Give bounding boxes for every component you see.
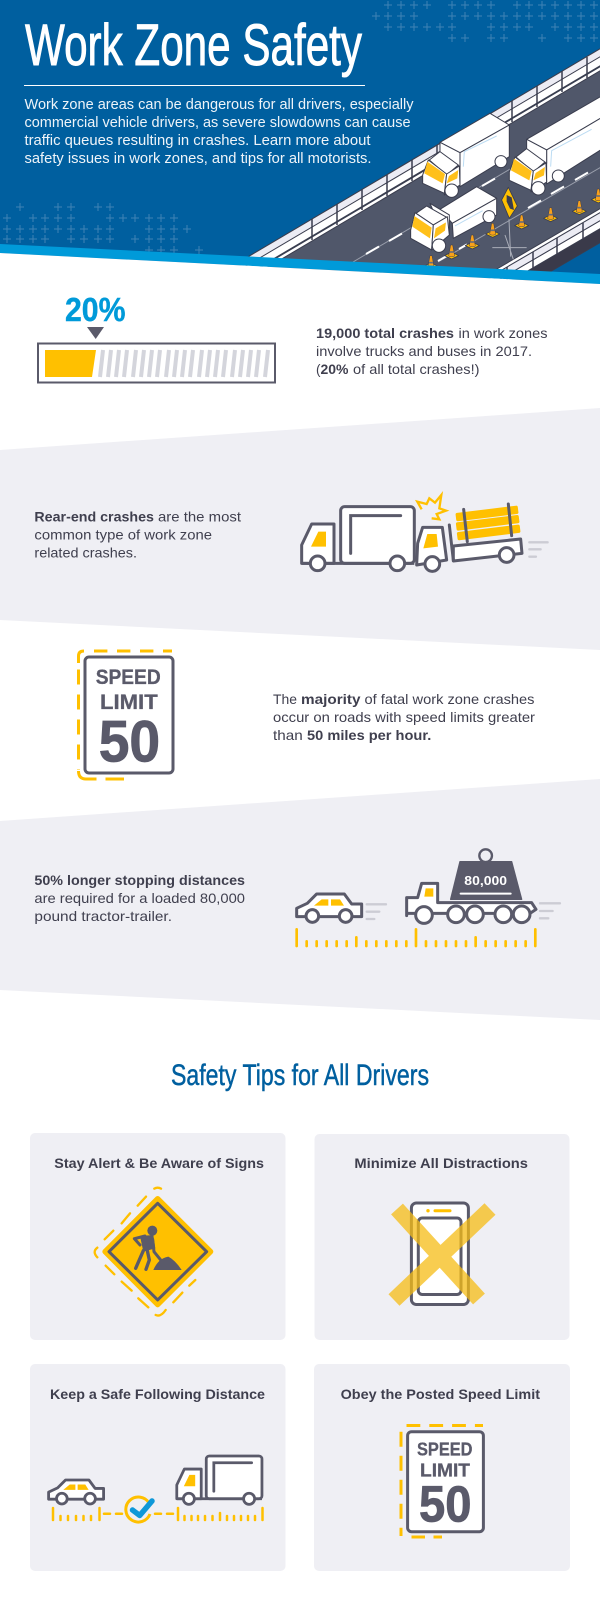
- heading: safety tips: Safety Tips for All Drivers: [171, 1059, 429, 1092]
- icon: car following truck: [49, 1456, 262, 1522]
- icon: speed limit 50 sign: [78, 651, 173, 779]
- fatal crashes text: of fatal work zone crashes: [364, 691, 534, 707]
- lower barrier: [490, 197, 600, 301]
- truck A: [423, 113, 509, 197]
- stopping distance text: pound tractor-trailer.: [34, 908, 172, 924]
- work zone sign: [502, 187, 517, 218]
- impact burst: [417, 495, 446, 519]
- motion lines: [529, 542, 548, 557]
- panel: stopping distance background: [0, 779, 600, 1020]
- icon: road work sign: [95, 1188, 211, 1316]
- icon: truck rear-end collision: [302, 495, 548, 571]
- panel: obey speed limit: [314, 1364, 570, 1571]
- panel: 20 percent of crashes: [38, 291, 548, 382]
- worker with shovel: [134, 1226, 182, 1270]
- card title: Obey the Posted Speed Limit: [341, 1386, 540, 1402]
- traffic cones: [424, 189, 600, 270]
- crash statistic text: of all total crashes!): [353, 361, 480, 377]
- fatal crashes text: than: [273, 727, 303, 743]
- panel: rear-end crashes background: [0, 408, 600, 650]
- traffic cones and trucks, drawn in zoom coordinates: [411, 95, 600, 270]
- icon: speed limit 50 sign: LIMIT: [100, 691, 158, 714]
- rear flatbed truck: [417, 504, 522, 571]
- road surface: [241, 59, 600, 300]
- marker arrow: [87, 327, 104, 339]
- crash statistic text: [316, 325, 548, 377]
- lead truck: [302, 507, 414, 571]
- icon: car and loaded truck stopping distance: [297, 849, 560, 946]
- icon: speed limit 50 sign: [401, 1426, 483, 1537]
- fatal crashes text: The: [273, 691, 297, 707]
- panel: stay alert: [30, 1133, 286, 1340]
- sign post cross: [492, 219, 527, 259]
- white page area under header: [0, 253, 600, 320]
- truck C: [411, 187, 497, 252]
- intro paragraph: [24, 97, 414, 167]
- rear-end crashes text: common type of work zone: [34, 527, 212, 543]
- 20% figure: 20%: [65, 291, 126, 328]
- icon: speed limit 50 sign: 50: [419, 1476, 472, 1533]
- background plus pattern, top right: [372, 1, 598, 42]
- card title: Stay Alert & Be Aware of Signs: [54, 1155, 264, 1171]
- intro paragraph: Work zone areas can be dangerous for all drivers, especially: [24, 97, 414, 113]
- icon: speed limit 50 sign: LIMIT: [420, 1460, 471, 1481]
- truck motion lines: [540, 903, 560, 918]
- fatal crashes text: 50 miles per hour.: [307, 727, 431, 743]
- tractor trailer: [407, 883, 536, 923]
- dashed outline: [95, 1188, 195, 1316]
- fatal crashes text: majority: [301, 691, 361, 707]
- crash statistic text: (: [316, 361, 321, 377]
- title rule: [24, 85, 365, 86]
- background plus pattern, bottom left: [3, 203, 203, 254]
- stopping distance text: [34, 872, 245, 924]
- 80,000 pound weight: 80,000: [464, 873, 507, 888]
- fatal crashes text: occur on roads with speed limits greater: [273, 709, 535, 725]
- car motion lines: [367, 904, 386, 919]
- rear-end crashes text: related crashes.: [34, 545, 137, 561]
- distance ruler: [297, 929, 535, 946]
- icon: speed limit 50 sign: SPEED: [96, 666, 161, 689]
- panel: minimize distractions: [314, 1134, 570, 1340]
- 80,000 pound weight: [451, 849, 522, 899]
- stopping distance text: are required for a loaded 80,000: [34, 890, 245, 906]
- icon: speed limit 50 sign: 50: [99, 710, 160, 774]
- icon: speed limit 50 sign: SPEED: [417, 1439, 472, 1460]
- intro paragraph: commercial vehicle drivers, as severe slowdowns can cause: [24, 115, 410, 131]
- icon: crossed-out phone: [394, 1203, 490, 1304]
- crash statistic text: 20%: [320, 361, 349, 377]
- upper barrier: [241, 37, 600, 283]
- illustration: isometric highway work zone: [241, 37, 600, 301]
- card title: Keep a Safe Following Distance: [50, 1386, 265, 1402]
- lane lines: [353, 104, 600, 262]
- diamond sign: [105, 1199, 211, 1305]
- intro paragraph: traffic queues resulting in crashes. Learn more about: [24, 133, 370, 149]
- title: Work Zone Safety: [25, 13, 362, 78]
- progress bar: [38, 344, 275, 382]
- header background: [0, 0, 600, 290]
- rear-end crashes text: Rear-end crashes: [34, 509, 154, 525]
- crash statistic text: involve trucks and buses in 2017.: [316, 343, 532, 359]
- truck B: [509, 95, 600, 195]
- rear-end crashes text: are the most: [158, 509, 241, 525]
- crash statistic text: 19,000 total crashes: [316, 325, 454, 341]
- crash statistic text: in work zones: [458, 325, 548, 341]
- stopping distance text: 50% longer stopping distances: [34, 872, 245, 888]
- intro paragraph: safety issues in work zones, and tips for all motorists.: [24, 151, 372, 167]
- car: [297, 894, 362, 922]
- fatal crashes text: [273, 691, 535, 743]
- panel: safe following distance: [30, 1364, 286, 1571]
- rear-end crashes text: [34, 509, 241, 561]
- light blue band: [0, 244, 600, 284]
- card title: Minimize All Distractions: [354, 1155, 528, 1171]
